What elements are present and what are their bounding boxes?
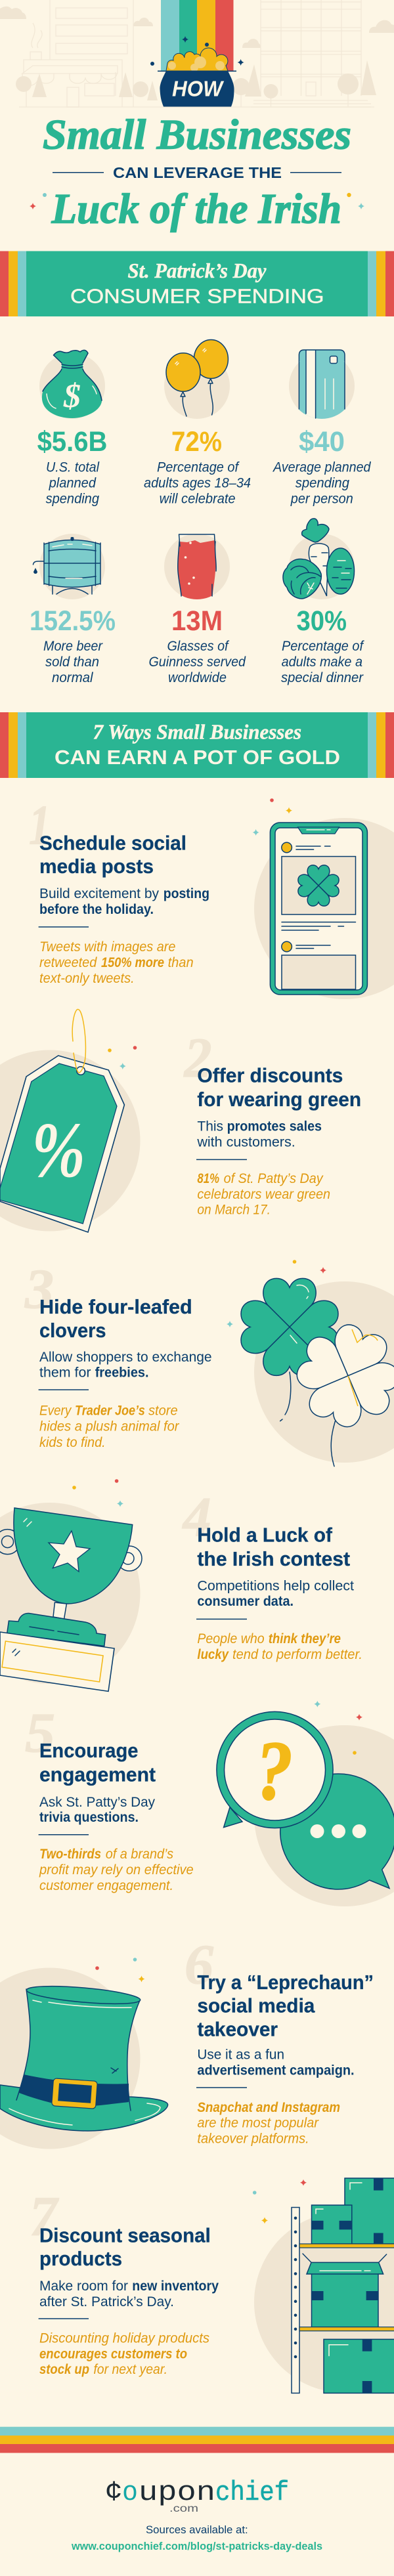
- fact: hides a plush animal for: [39, 1419, 179, 1434]
- description: [196, 1119, 322, 1149]
- fact: 150% more: [101, 955, 164, 970]
- footer logo: .com: [169, 2503, 198, 2514]
- footer logo: ¢: [105, 2477, 123, 2508]
- footer logo: upon: [139, 2477, 215, 2508]
- title: [30, 112, 364, 232]
- fact: Trader Joe’s: [75, 1404, 145, 1419]
- value: 30%: [297, 605, 347, 637]
- description: Build excitement by: [39, 886, 159, 901]
- illustration: trophy: [0, 1479, 142, 1691]
- fact: takeover platforms.: [197, 2131, 309, 2146]
- potato: [327, 548, 355, 594]
- rainbow: [161, 0, 234, 71]
- fact: Every: [39, 1404, 72, 1419]
- description: Competitions help collect: [197, 1578, 354, 1594]
- heading: takeover: [197, 2018, 278, 2040]
- description: promotes sales: [227, 1119, 322, 1134]
- description: Percentage of: [157, 460, 240, 475]
- heading: Offer discounts: [197, 1064, 343, 1087]
- numeral 2: 2: [183, 1026, 211, 1089]
- description: [144, 460, 251, 507]
- description: U.S. total: [46, 460, 100, 475]
- description: [39, 1350, 212, 1380]
- white clover: [285, 1312, 394, 1439]
- description: Allow shoppers to exchange: [39, 1350, 212, 1365]
- panel: step 2 discounts: [0, 1009, 361, 1232]
- fact: kids to find.: [39, 1435, 106, 1450]
- lower shelf: [299, 2327, 394, 2331]
- heading: Schedule social: [39, 832, 186, 855]
- description: [272, 460, 372, 507]
- value: $40: [299, 426, 345, 458]
- title line 3: Luck of the Irish: [51, 185, 341, 232]
- heading: Try a “Leprechaun”: [197, 1971, 374, 1994]
- fact: tend to perform better.: [232, 1647, 362, 1662]
- clover icon: [298, 865, 339, 906]
- carrot: [309, 544, 329, 596]
- description: consumer data.: [197, 1594, 294, 1609]
- icon: money bag: $: [63, 377, 81, 415]
- fact: for next year.: [93, 2362, 167, 2377]
- heading: media posts: [39, 855, 154, 878]
- description: spending: [46, 492, 99, 507]
- description: posting: [164, 886, 209, 901]
- description: planned: [49, 476, 97, 491]
- numeral 7: 7: [30, 2185, 59, 2248]
- sources line: Sources available at:: [146, 2523, 248, 2536]
- panel: step 3 clovers: [24, 1257, 394, 1467]
- hat band: [19, 2074, 129, 2107]
- fact: [197, 2100, 340, 2146]
- panel: step 6 takeover: [0, 1933, 374, 2149]
- trees right: [232, 60, 376, 98]
- value: 72%: [171, 426, 222, 458]
- handles: [0, 1530, 142, 1571]
- illustration: speech bubbles: [217, 1701, 394, 1906]
- illustration: clovers: [227, 1260, 394, 1467]
- pot body: [160, 71, 234, 106]
- description: spending: [296, 476, 349, 491]
- description: per person: [290, 492, 353, 507]
- storefront: [22, 23, 122, 107]
- icon: credit card: [299, 350, 345, 422]
- stat: special dinner: [281, 519, 364, 685]
- open box: [303, 2254, 387, 2327]
- fact: [39, 1404, 179, 1450]
- title line 1: Small Businesses: [43, 112, 351, 159]
- green clover: [241, 1278, 338, 1375]
- description: This: [197, 1119, 223, 1134]
- fact: than: [168, 955, 194, 970]
- value: 152.5%: [30, 605, 116, 637]
- fact: of a brand’s: [106, 1847, 173, 1862]
- pot of gold: [158, 48, 236, 106]
- illustration: price tag: [0, 1009, 141, 1232]
- cabbage: [283, 559, 321, 599]
- title line 2: CAN LEVERAGE THE: [113, 164, 282, 181]
- fact: celebrators wear green: [197, 1187, 330, 1202]
- fact: [39, 2331, 209, 2377]
- crown: [16, 1989, 141, 2111]
- stat: beer sold: [30, 534, 116, 685]
- heading: for wearing green: [197, 1088, 361, 1111]
- footer logo: chief: [215, 2477, 289, 2508]
- star: [49, 1531, 90, 1572]
- banner heading: St. Patrick’s Day: [127, 259, 267, 282]
- description: adults ages 18–34: [144, 476, 251, 491]
- panel: step 7 seasonal products: [30, 2178, 394, 2393]
- fact: on March 17.: [197, 1202, 271, 1217]
- illustration: phone: [253, 798, 394, 999]
- description: Ask St. Patty’s Day: [39, 1795, 155, 1810]
- description: Guinness served: [148, 655, 246, 670]
- icon: barrel: [33, 537, 100, 594]
- heading: [197, 1064, 361, 1111]
- fact: People who: [197, 1631, 265, 1646]
- description: [197, 1578, 354, 1609]
- illustration: leprechaun hat: [0, 1958, 168, 2149]
- fact: Tweets with images are: [39, 939, 176, 955]
- fact: [39, 1847, 194, 1893]
- description: [281, 639, 364, 685]
- description: after St. Patrick’s Day.: [39, 2294, 174, 2309]
- description: special dinner: [281, 670, 364, 685]
- heading: Hold a Luck of: [197, 1524, 333, 1547]
- fact: customer engagement.: [39, 1878, 173, 1893]
- clouds: [0, 7, 394, 48]
- heading: clovers: [39, 1319, 106, 1342]
- carrot leaves: [302, 519, 329, 542]
- description: [43, 639, 103, 685]
- description: Average planned: [272, 460, 372, 475]
- fact: think they’re: [269, 1631, 341, 1646]
- bottom box: [324, 2339, 394, 2393]
- heading: engagement: [39, 1763, 156, 1786]
- word HOW: HOW: [172, 77, 225, 101]
- icon: vegetables: [283, 519, 355, 599]
- description: [39, 2279, 219, 2309]
- numeral 1: 1: [29, 794, 51, 857]
- office building left: [50, 0, 133, 107]
- description: new inventory: [132, 2279, 219, 2294]
- green bubble: [280, 1774, 394, 1889]
- description: [39, 886, 209, 917]
- icon: beer glass: [178, 534, 216, 599]
- icon: money bag: [42, 350, 102, 418]
- numeral 3: 3: [24, 1257, 54, 1320]
- stat: young adults celebrate: [144, 340, 251, 507]
- heading: [197, 1524, 350, 1570]
- description: Make room for: [39, 2279, 128, 2294]
- description: Glasses of: [167, 639, 230, 654]
- percent symbol: %: [32, 1106, 85, 1193]
- office building right: [251, 0, 371, 107]
- fact: encourages customers to: [39, 2346, 187, 2362]
- description: adults make a: [282, 655, 362, 670]
- description: [197, 2048, 355, 2078]
- heading: the Irish contest: [197, 1547, 350, 1570]
- fact: store: [148, 1404, 178, 1419]
- upper shelf: [299, 2244, 394, 2248]
- buckle: [52, 2078, 97, 2109]
- fact: [197, 1171, 330, 1217]
- description: them for: [39, 1365, 91, 1380]
- description: Use it as a fun: [197, 2048, 284, 2063]
- description: freebies.: [95, 1365, 148, 1380]
- fact: Two-thirds: [39, 1847, 101, 1862]
- heading: [39, 2223, 211, 2270]
- title sparkles: [30, 193, 364, 209]
- heading: [39, 1739, 156, 1786]
- banner subheading: CAN EARN A POT OF GOLD: [55, 746, 340, 769]
- numeral 5: 5: [25, 1701, 55, 1764]
- fact: retweeted: [39, 955, 98, 970]
- question bubble: ?: [256, 1724, 293, 1817]
- stat: spending per person: [272, 350, 372, 507]
- brim: [0, 2085, 168, 2131]
- fact: stock up: [39, 2362, 89, 2377]
- footer logo: o: [122, 2477, 138, 2508]
- sparkles around pot: [150, 36, 244, 66]
- fact: Discounting holiday products: [39, 2331, 209, 2346]
- trees left: [16, 72, 158, 100]
- fact: Snapchat and Instagram: [197, 2100, 340, 2115]
- description: sold than: [45, 655, 99, 670]
- numeral 6: 6: [185, 1933, 213, 1996]
- description: [39, 1795, 155, 1825]
- fact: lucky: [197, 1647, 229, 1662]
- heading: [39, 1295, 192, 1342]
- plinth: [0, 1632, 114, 1691]
- panel: step 4 contest: [0, 1479, 362, 1691]
- footer rainbow stripes: [0, 2427, 394, 2453]
- panel: step 1 social media: [29, 794, 394, 999]
- fact: of St. Patty’s Day: [224, 1171, 324, 1186]
- fact: text-only tweets.: [39, 971, 135, 986]
- description: [46, 460, 100, 507]
- fact: [39, 939, 194, 986]
- stat: total spending: [37, 350, 107, 507]
- heading: [197, 1971, 374, 2040]
- sources url: www.couponchief.com/blog/st-patricks-day-deals: [71, 2540, 322, 2552]
- banner: consumer spending: [0, 251, 394, 316]
- shelf post: [292, 2207, 299, 2393]
- fact: 81%: [197, 1171, 219, 1186]
- description: worldwide: [168, 670, 227, 685]
- description: advertisement campaign.: [197, 2063, 355, 2078]
- panel: step 5 engagement: [25, 1701, 394, 1906]
- heading: Encourage: [39, 1739, 138, 1762]
- icon: balloons: [166, 340, 228, 416]
- fact: profit may rely on effective: [39, 1862, 194, 1878]
- header: [0, 0, 394, 107]
- background town scene: [0, 0, 394, 107]
- description: before the holiday.: [39, 902, 154, 917]
- heading: Hide four-leafed: [39, 1295, 192, 1318]
- description: normal: [52, 670, 94, 685]
- value: 13M: [171, 605, 223, 637]
- gold coins: [166, 48, 228, 72]
- heading: social media: [197, 1994, 315, 2017]
- heading: Discount seasonal: [39, 2223, 211, 2246]
- fact: are the most popular: [197, 2116, 319, 2131]
- heading: [39, 832, 186, 878]
- description: Percentage of: [282, 639, 364, 654]
- footer logo: [105, 2477, 289, 2514]
- question bubble: [217, 1711, 333, 1828]
- heading: products: [39, 2247, 122, 2270]
- description: with customers.: [196, 1134, 296, 1149]
- fact: [197, 1631, 362, 1662]
- illustration: shelves with boxes: [253, 2178, 394, 2393]
- description: trivia questions.: [39, 1810, 139, 1825]
- numeral 4: 4: [182, 1486, 211, 1549]
- banner heading: 7 Ways Small Businesses: [93, 720, 301, 744]
- top boxes: [311, 2178, 394, 2244]
- banner subheading: CONSUMER SPENDING: [70, 285, 324, 308]
- description: [148, 639, 246, 685]
- banner: 7 ways: [0, 712, 394, 778]
- stat: Guinness glasses: [148, 534, 246, 685]
- description: More beer: [43, 639, 103, 654]
- value: $5.6B: [37, 426, 107, 458]
- description: will celebrate: [160, 492, 236, 507]
